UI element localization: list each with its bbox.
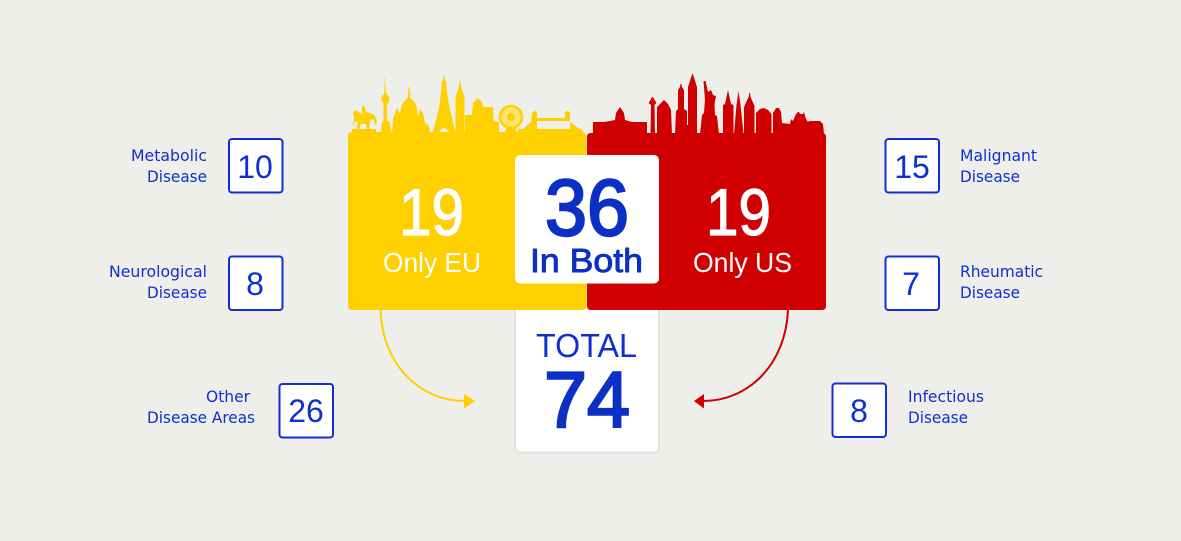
total number: 74	[544, 355, 630, 444]
US block	[587, 133, 826, 310]
neurological label: Neurological	[109, 262, 207, 281]
infectious label: Infectious	[908, 387, 984, 406]
metabolic box	[229, 139, 282, 192]
infectious box	[832, 384, 886, 437]
rheumatic box	[886, 256, 939, 310]
neurological label	[109, 262, 207, 302]
infectious label: Disease	[908, 408, 968, 427]
icon: EU skyline	[352, 73, 581, 134]
metabolic label: Metabolic	[131, 146, 207, 165]
total card	[515, 290, 659, 452]
other label	[147, 387, 255, 427]
other disease areas stat	[147, 384, 333, 438]
other box	[280, 384, 333, 438]
in both number: 36	[545, 163, 629, 252]
panel: only EU with skyline	[348, 73, 586, 310]
metabolic label	[131, 146, 207, 186]
arrow: US to total	[694, 309, 788, 408]
malignant disease stat	[886, 139, 1037, 192]
malignant box	[886, 139, 939, 192]
US number: 19	[706, 175, 771, 249]
neurological number: 8	[246, 266, 264, 302]
rheumatic number: 7	[902, 266, 920, 302]
metabolic label: Disease	[147, 167, 207, 186]
malignant number: 15	[894, 149, 930, 185]
icon: ferris wheel	[500, 106, 522, 128]
infectious number: 8	[850, 393, 868, 429]
icon: US skyline	[593, 73, 824, 134]
arrow: EU to total	[380, 309, 475, 408]
infectious disease stat	[832, 384, 984, 437]
rheumatic label	[960, 262, 1043, 302]
metabolic disease stat	[131, 139, 282, 192]
rheumatic label: Disease	[960, 283, 1020, 302]
EU label: Only EU	[383, 247, 481, 278]
US label: Only US	[693, 247, 792, 278]
rheumatic disease stat	[886, 256, 1043, 310]
malignant label: Malignant	[960, 146, 1037, 165]
other label: Disease Areas	[147, 408, 255, 427]
total label: TOTAL	[536, 327, 637, 364]
EU block	[348, 129, 586, 310]
panel: only US with skyline	[587, 73, 826, 310]
other label: Other	[206, 387, 250, 406]
panel: in both	[515, 155, 659, 284]
neurological label: Disease	[147, 283, 207, 302]
neurological box	[229, 256, 282, 310]
metabolic number: 10	[237, 149, 273, 185]
in both label: In Both	[530, 242, 643, 279]
rheumatic label: Rheumatic	[960, 262, 1043, 281]
EU number: 19	[399, 175, 464, 249]
malignant label	[960, 146, 1037, 186]
infectious label	[908, 387, 984, 427]
other number: 26	[288, 393, 324, 429]
neurological disease stat	[109, 256, 282, 310]
malignant label: Disease	[960, 167, 1020, 186]
